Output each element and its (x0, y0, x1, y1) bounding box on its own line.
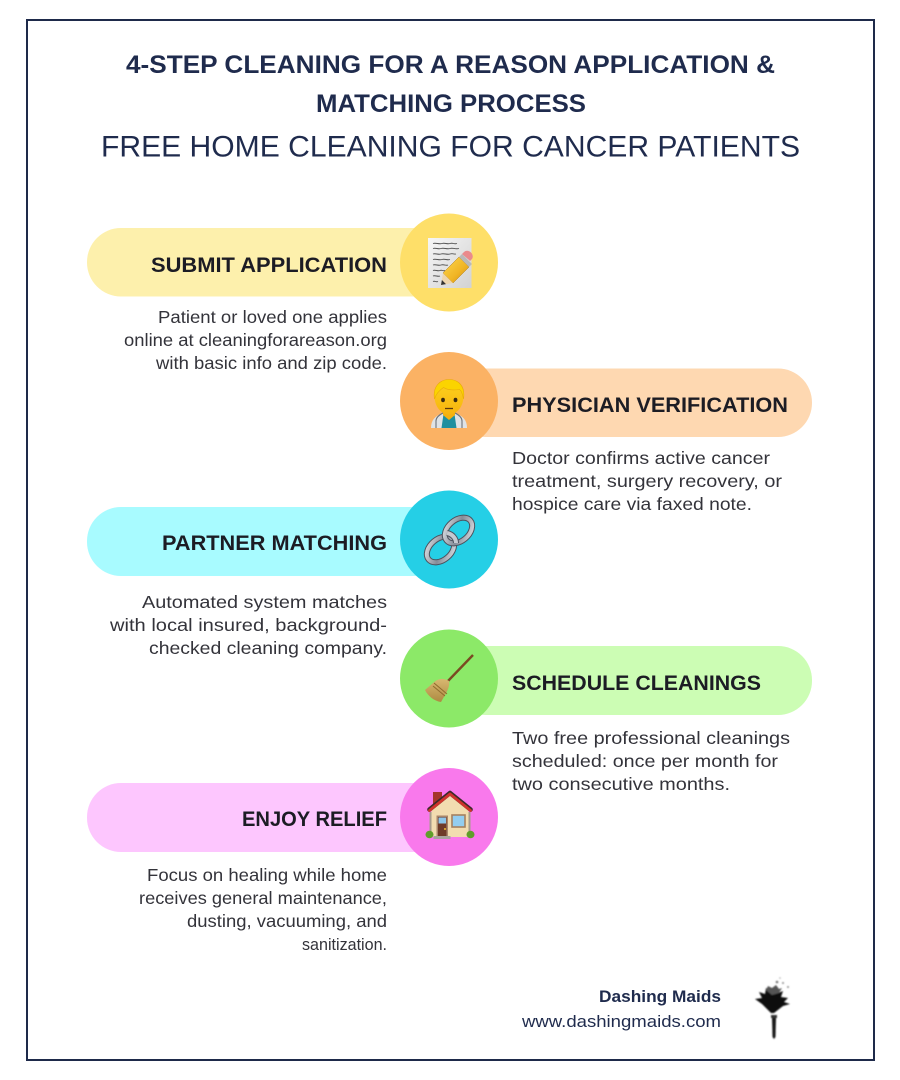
icon: memo and pencil (428, 238, 473, 288)
footer brand text: Dashing Maids (599, 988, 721, 1006)
step 2 heading: PHYSICIAN VERIFICATION (512, 393, 788, 417)
title: MATCHING PROCESS (316, 90, 586, 118)
footer brand text (521, 988, 721, 1031)
step 1 banner (87, 228, 447, 296)
title: 4-STEP CLEANING FOR A REASON APPLICATION & (126, 51, 775, 79)
step 2 banner (452, 368, 812, 437)
step 1 circle (400, 214, 498, 312)
step 2 description: hospice care via faxed note. (512, 494, 752, 514)
step 5 heading: ENJOY RELIEF (242, 807, 387, 831)
step 2 description: Doctor confirms active cancer (512, 448, 770, 468)
icon: house (426, 792, 474, 839)
step 2 description (512, 448, 782, 514)
step 2 circle (400, 352, 498, 450)
step 5: enjoy relief (87, 768, 498, 866)
step 3 description (109, 592, 387, 658)
step 5 description: dusting, vacuuming, and (187, 911, 387, 931)
step 5 description: receives general maintenance, (139, 888, 387, 908)
step 5 description (139, 865, 387, 954)
icon: chain links (422, 512, 477, 568)
step 5 banner (87, 783, 447, 852)
step 1 heading: SUBMIT APPLICATION (151, 253, 387, 277)
step 5 description: sanitization. (302, 935, 387, 954)
step 3 circle (400, 490, 498, 588)
step 3 description: checked cleaning company. (149, 638, 387, 658)
step 3 description: with local insured, background- (109, 615, 387, 635)
step 5 description: Focus on healing while home (147, 865, 387, 885)
step 4 description: two consecutive months. (512, 774, 730, 794)
icon: broom (425, 655, 473, 702)
step 4 description (512, 728, 790, 794)
step 3 banner (87, 507, 447, 576)
step 4 heading: SCHEDULE CLEANINGS (512, 671, 761, 695)
step 4 description: scheduled: once per month for (512, 751, 778, 771)
step 1 description: with basic info and zip code. (155, 353, 387, 373)
step 3 heading: PARTNER MATCHING (162, 531, 387, 555)
step 1 description: online at cleaningforareason.org (124, 330, 387, 350)
step 4 description: Two free professional cleanings (512, 728, 790, 748)
step 3 description: Automated system matches (142, 592, 387, 612)
step 1: submit application (87, 214, 498, 312)
icon: feather duster logo (755, 977, 790, 1039)
step 2 description: treatment, surgery recovery, or (512, 471, 782, 491)
step 5 circle (400, 768, 498, 866)
step 4 circle (400, 630, 498, 728)
step 2: physician verification (400, 352, 812, 450)
title (126, 51, 775, 118)
step 4: schedule cleanings (400, 630, 812, 728)
footer brand text: www.dashingmaids.com (521, 1012, 721, 1031)
step 1 description: Patient or loved one applies (158, 307, 387, 327)
step 4 banner (452, 646, 812, 715)
step 1 description (124, 307, 387, 373)
subtitle: FREE HOME CLEANING FOR CANCER PATIENTS (101, 130, 800, 164)
icon: doctor (431, 380, 467, 428)
step 3: partner matching (87, 490, 498, 588)
